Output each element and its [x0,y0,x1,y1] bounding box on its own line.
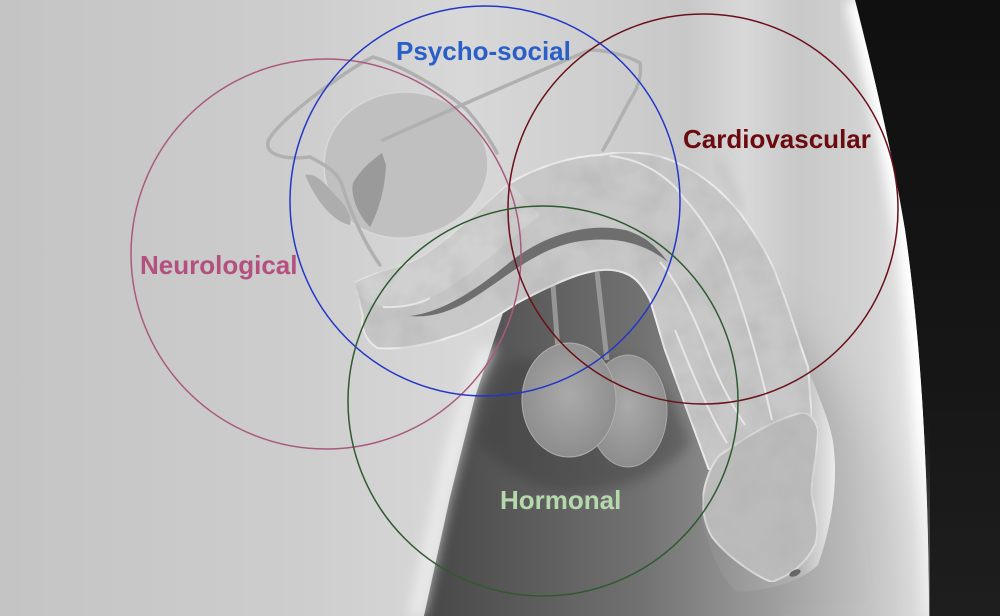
organ: thin ducts [268,50,641,265]
organ: layer boundaries [383,156,772,443]
organ: vertical connectors [553,272,607,360]
thigh edge highlight [408,345,497,616]
organ: small glands [305,175,350,225]
organ: tip [703,413,818,582]
body right edge highlight [855,0,929,616]
label: Hormonal: Hormonal [500,485,621,515]
circle: Cardiovascular [508,14,898,404]
organ: dark groove between tubes [410,228,668,316]
circle: Psycho-social [290,6,680,396]
organ: two rounded lower structures [522,343,667,467]
label: Neurological: Neurological [140,250,297,280]
label: Psycho-social: Psycho-social [396,36,571,66]
organ: outer sheath near tip [701,345,835,592]
organ: main body [355,152,812,470]
label: Cardiovascular: Cardiovascular [683,124,871,154]
dark pocket behind lower structures [478,360,690,493]
organ: large rounded structure, upper [324,92,488,238]
abdominal crease [718,160,742,210]
circle: Neurological [131,59,521,449]
lower shaded region [400,255,930,616]
organ: tip opening [788,568,802,578]
circle: Hormonal [348,206,738,596]
organ: upper tube left end [355,183,540,307]
